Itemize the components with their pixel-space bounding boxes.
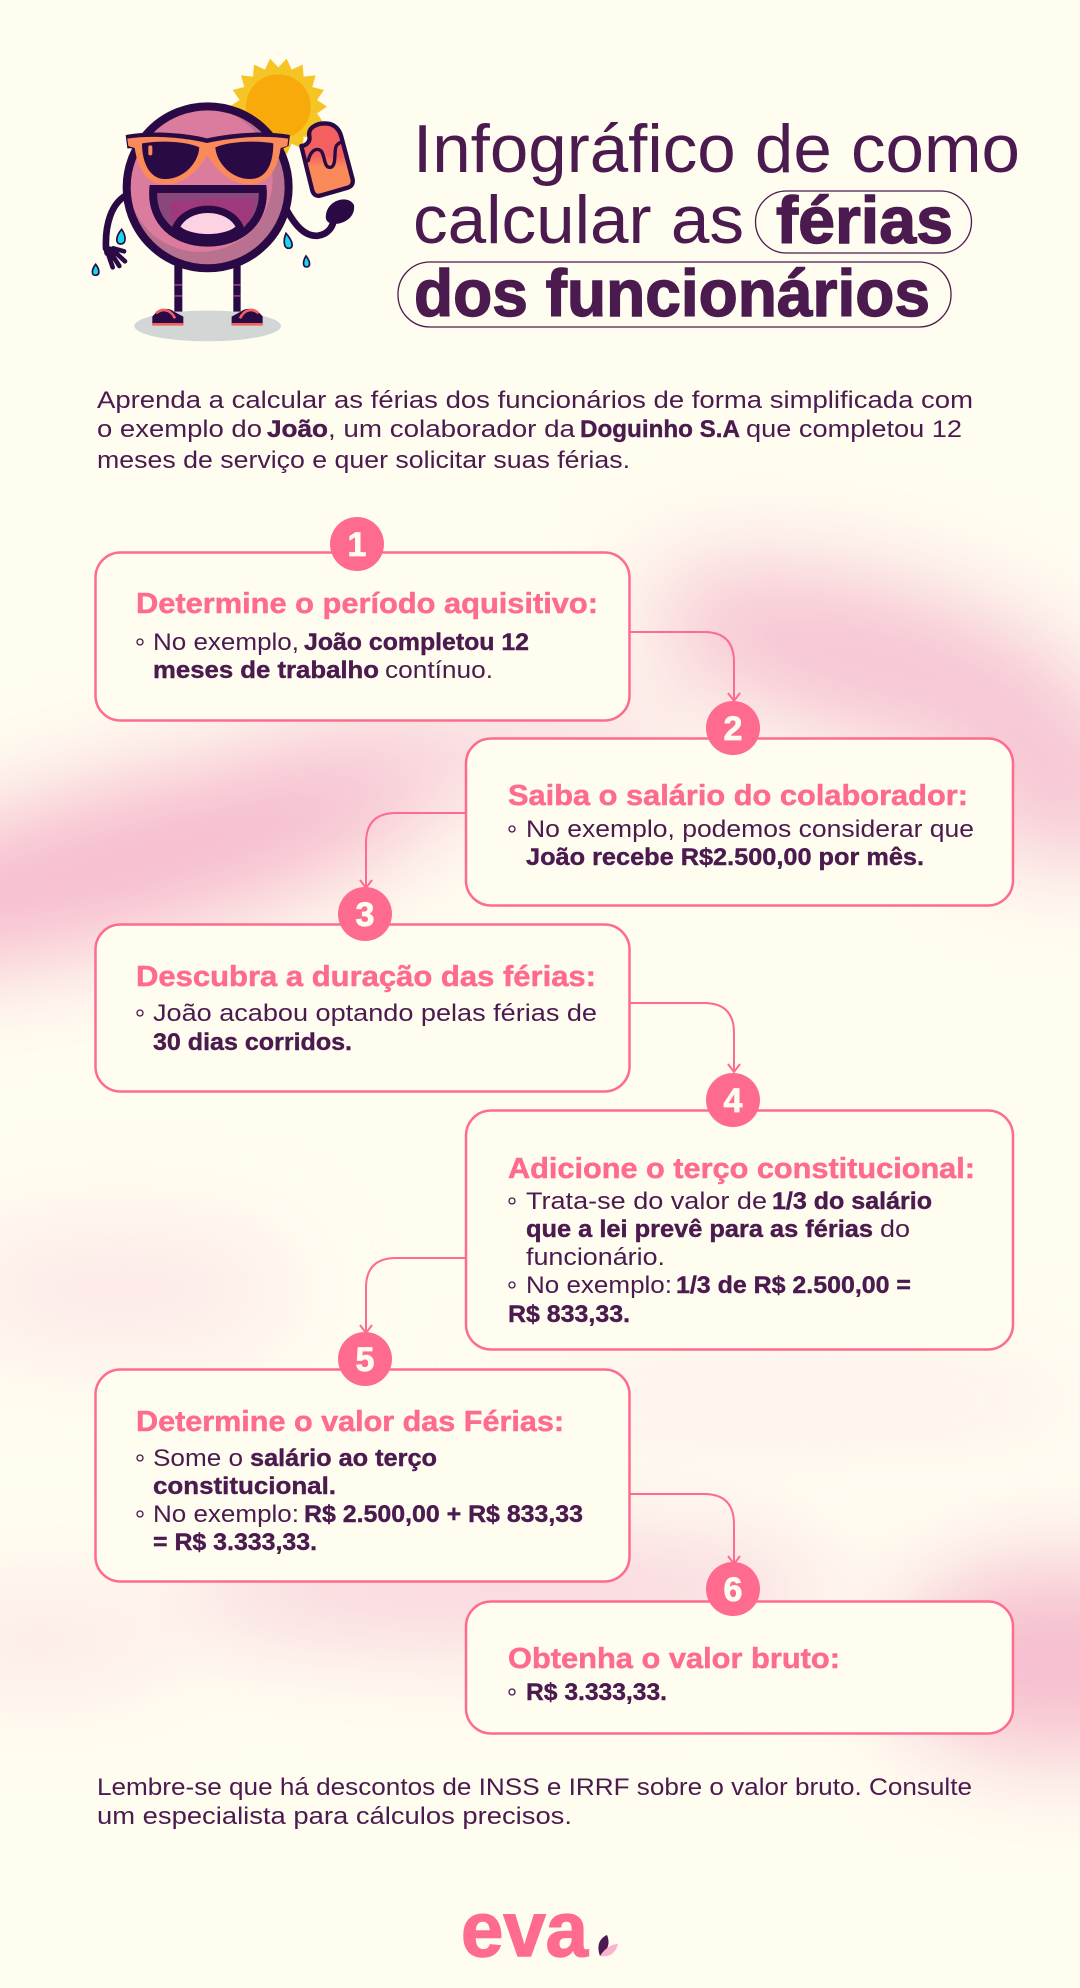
badge 6: 6: [724, 1571, 742, 1609]
heading: Adicione o terço constitucional:: [508, 1153, 975, 1185]
panel: step 3: [96, 887, 630, 1092]
badge 3: 3: [356, 896, 374, 934]
pill: dos funcionários: [398, 262, 951, 327]
list: No exemplo,: [153, 629, 299, 656]
arrow: step 4 to 5: [360, 1258, 466, 1333]
list: contínuo.: [385, 657, 493, 684]
title: Infográfico de como: [413, 111, 1020, 187]
card box: [96, 552, 630, 720]
heading: Obtenha o valor bruto:: [508, 1643, 840, 1675]
list: = R$ 3.333,33.: [153, 1529, 317, 1556]
list: funcionário.: [526, 1244, 665, 1271]
intro text: João: [267, 416, 328, 443]
arrow: step 2 to 3: [360, 813, 466, 888]
intro text: que completou 12: [746, 416, 962, 443]
list: que a lei prevê para as férias: [526, 1216, 873, 1243]
sandals: [152, 309, 263, 325]
card box: [96, 1370, 630, 1582]
list: [509, 816, 974, 871]
intro text: Doguinho S.A: [580, 416, 740, 443]
list: João recebe R$2.500,00 por mês.: [526, 844, 924, 871]
list: salário ao terço: [250, 1445, 437, 1472]
list: 1/3 de R$ 2.500,00 =: [676, 1272, 911, 1299]
legs: [174, 265, 241, 312]
icon: sweat drops: [92, 229, 310, 275]
list: R$ 2.500,00 + R$ 833,33: [304, 1501, 583, 1528]
card box: [466, 738, 1013, 906]
intro text: [97, 387, 973, 474]
intro text: Aprenda a calcular as férias dos funcionários de forma simplificada com: [97, 387, 973, 414]
title: férias: [776, 183, 953, 257]
badge 2: 2: [724, 710, 742, 748]
intro text: o exemplo do: [97, 416, 262, 443]
title: dos funcionários: [414, 256, 930, 330]
intro text: , um colaborador da: [328, 416, 576, 443]
list: R$ 3.333,33.: [526, 1679, 667, 1706]
list: [137, 629, 529, 684]
list: No exemplo:: [153, 1501, 299, 1528]
icon: popsicle: [301, 123, 354, 224]
icon: sun: [230, 59, 327, 155]
card box: [96, 924, 630, 1092]
arrow: step 3 to 4: [630, 1003, 740, 1072]
panel: step 4: [466, 1073, 1013, 1350]
badge 4: [706, 1073, 760, 1127]
list: João acabou optando pelas férias de: [153, 1000, 597, 1027]
heading: Determine o valor das Férias:: [136, 1406, 564, 1438]
badge 1: [330, 517, 384, 571]
panel: step 6: [466, 1562, 1013, 1734]
shadow: [134, 311, 281, 341]
heading: Determine o período aquisitivo:: [136, 588, 598, 620]
panel: step 5: [96, 1332, 630, 1582]
list: 1/3 do salário: [772, 1188, 932, 1215]
panel: step 2: [466, 701, 1013, 906]
list: No exemplo:: [526, 1272, 672, 1299]
list: 30 dias corridos.: [153, 1029, 352, 1056]
pill: férias: [756, 191, 972, 253]
badge 2: [706, 701, 760, 755]
intro text: meses de serviço e quer solicitar suas férias.: [97, 447, 630, 474]
list: [137, 1000, 597, 1056]
sunglasses: [126, 133, 290, 184]
logo: eva: eva: [461, 1885, 589, 1973]
list: Some o: [153, 1445, 243, 1472]
list: R$ 833,33.: [508, 1301, 630, 1328]
card box: [466, 1110, 1013, 1350]
list: Trata-se do valor de: [526, 1188, 767, 1215]
arrow: step 1 to 2: [630, 632, 740, 701]
card box: [466, 1602, 1013, 1734]
list: constitucional.: [153, 1473, 336, 1500]
list: [508, 1188, 932, 1328]
badge 3: [338, 887, 392, 941]
illustration: character with sunglasses, sun and popsicle: [92, 59, 354, 341]
list: meses de trabalho: [153, 657, 379, 684]
footer note: [97, 1774, 972, 1830]
list: No exemplo, podemos considerar que: [526, 816, 974, 843]
badge 1: 1: [348, 526, 366, 564]
badge 5: 5: [356, 1341, 374, 1379]
badge 4: 4: [724, 1082, 743, 1120]
arrow: step 5 to 6: [630, 1494, 740, 1564]
heading: Saiba o salário do colaborador:: [508, 780, 968, 812]
list: do: [880, 1216, 910, 1243]
footer note: Lembre-se que há descontos de INSS e IRRF sobre o valor bruto. Consulte: [97, 1774, 972, 1801]
arms: [104, 195, 334, 267]
body: [127, 106, 289, 268]
badge 5: [338, 1332, 392, 1386]
title: calcular as: [413, 182, 744, 258]
panel: step 1: [96, 517, 630, 720]
title: [398, 111, 1020, 330]
heading: Descubra a duração das férias:: [136, 961, 596, 993]
badge 6: [706, 1562, 760, 1616]
footer note: um especialista para cálculos precisos.: [97, 1803, 572, 1830]
mouth: [153, 189, 263, 243]
list: João completou 12: [304, 629, 529, 656]
list: [137, 1445, 583, 1556]
